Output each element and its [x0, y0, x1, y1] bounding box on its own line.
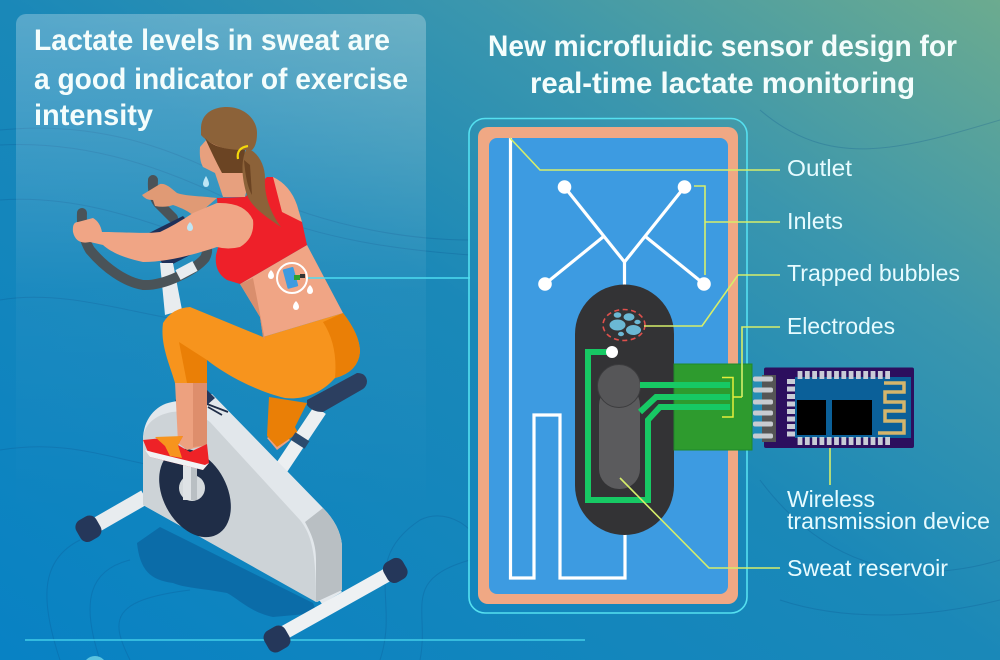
chips	[797, 400, 826, 435]
electrode bracket	[722, 378, 742, 417]
module left pads	[787, 382, 795, 434]
heading: right	[488, 30, 957, 100]
bike stem	[160, 263, 182, 315]
pedal top	[175, 388, 215, 405]
label: trapped bubbles: Trapped bubbles	[787, 260, 960, 286]
wireless transmission module	[753, 368, 914, 448]
label: outlet: Outlet	[787, 155, 853, 181]
heading: right: New microfluidic sensor design for	[488, 30, 957, 63]
module board	[764, 368, 914, 448]
module blue area	[795, 377, 911, 438]
label: sweat reservoir: Sweat reservoir	[787, 555, 948, 581]
vents	[207, 404, 228, 415]
back skin	[240, 245, 343, 337]
leggings	[162, 307, 360, 398]
dark chamber	[575, 284, 674, 535]
label: electrodes: Electrodes	[787, 313, 895, 339]
bike seat	[307, 373, 367, 412]
heading: left: intensity	[34, 99, 154, 132]
flywheel	[145, 436, 245, 550]
shin	[175, 382, 207, 450]
panel: left heading background	[16, 14, 426, 514]
shoulder back	[267, 177, 302, 222]
sports bra	[216, 177, 307, 284]
electrode traces	[588, 352, 730, 500]
inlet channels	[538, 180, 711, 291]
blue substrate	[489, 138, 728, 594]
bike front foot	[72, 497, 145, 545]
heading: left	[34, 24, 408, 132]
hair tie	[238, 146, 248, 159]
divider line at bottom	[25, 639, 585, 641]
heading: left: Lactate levels in sweat are	[34, 24, 390, 57]
bike seat post	[278, 410, 320, 473]
bike console	[145, 216, 205, 268]
outlet channel	[510, 138, 625, 578]
bike shadow	[137, 527, 317, 617]
illustration: woman on exercise bike	[72, 107, 411, 655]
sensing dot	[606, 346, 618, 358]
label: wireless transmission device: Wireless	[787, 486, 875, 512]
connector pins	[753, 375, 776, 442]
shoe	[143, 436, 209, 470]
rear leg	[267, 397, 307, 450]
green circuit pad	[674, 364, 752, 450]
sensor on back	[277, 263, 307, 293]
module bottom pads	[800, 437, 888, 445]
near handlebar	[82, 213, 207, 285]
sweat drops	[187, 176, 313, 310]
antenna	[878, 383, 904, 433]
bike rear foot	[261, 555, 411, 655]
crank	[183, 465, 193, 500]
peach border	[478, 127, 738, 604]
label: wireless transmission device	[787, 486, 990, 534]
sweat reservoir	[598, 364, 640, 489]
far handlebar	[153, 180, 173, 218]
far arm	[142, 184, 217, 217]
bike body	[143, 388, 342, 602]
diagram: microfluidic sensor	[469, 118, 752, 613]
module top pads	[800, 371, 888, 379]
hair	[201, 107, 281, 227]
heading: right: real-time lactate monitoring	[530, 67, 915, 100]
outer outline	[469, 118, 747, 613]
leggings shade	[179, 313, 360, 383]
partial circle at bottom edge	[83, 656, 107, 660]
trapped bubbles	[603, 310, 645, 340]
label: inlets: Inlets	[787, 208, 843, 234]
label: wireless transmission device: transmission device	[787, 508, 990, 534]
neck	[200, 130, 252, 197]
heading: left: a good indicator of exercise	[34, 63, 408, 96]
near arm	[73, 203, 253, 262]
flywheel hub	[179, 475, 205, 501]
leader lines	[510, 138, 830, 568]
connector line from back to sensor	[308, 277, 470, 279]
